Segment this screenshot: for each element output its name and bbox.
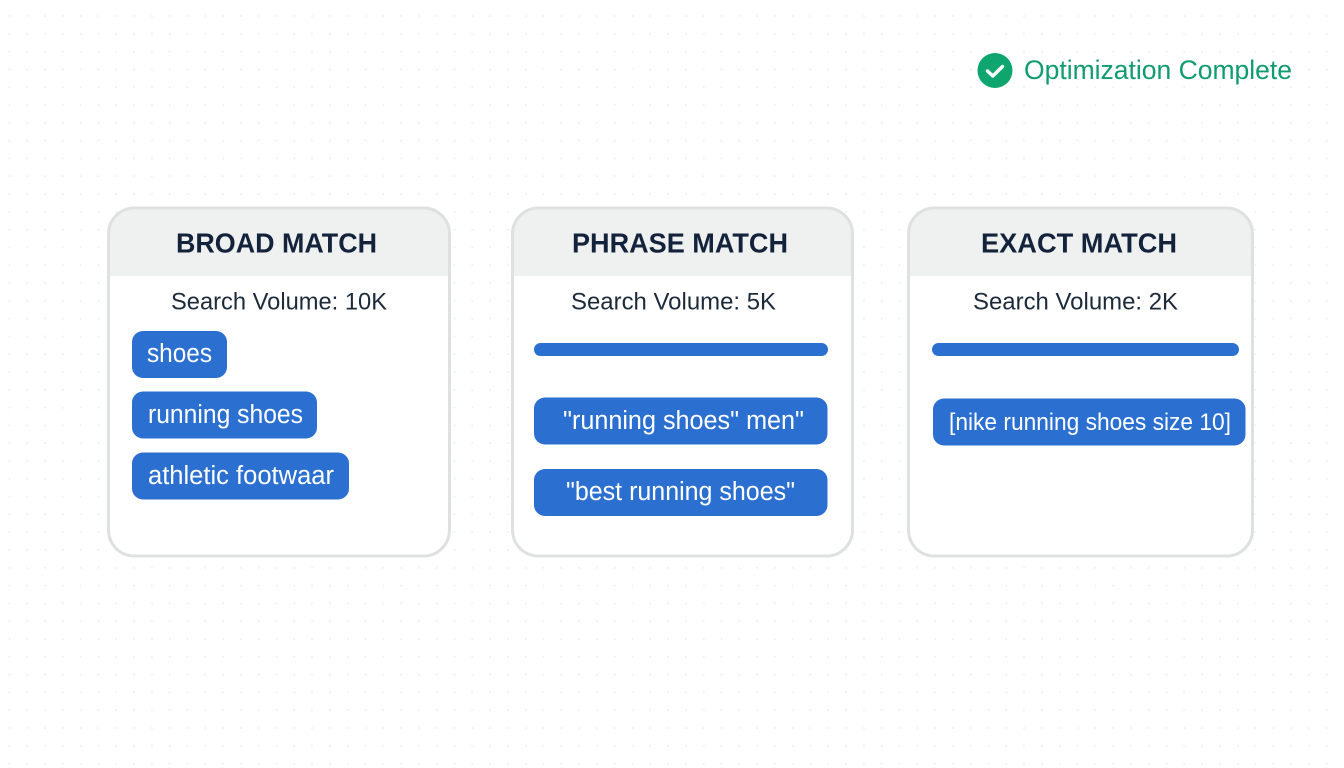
keyword: running shoes: running shoes xyxy=(148,401,303,429)
panel: broad match xyxy=(108,208,450,556)
keyword: nike running shoes size 10: [nike running shoes size 10] xyxy=(949,409,1231,436)
search volume: Search Volume: 5K xyxy=(571,288,777,316)
heading: BROAD MATCH xyxy=(176,228,377,258)
keyword: nike running shoes size 10 xyxy=(933,398,1246,446)
heading: PHRASE MATCH xyxy=(572,228,788,258)
panel: exact match xyxy=(908,208,1252,556)
search volume: Search Volume: 2K xyxy=(973,288,1179,316)
keyword: best running shoes xyxy=(534,469,828,516)
volume bar xyxy=(534,343,828,356)
keyword: shoes: shoes xyxy=(147,340,212,368)
keyword: running shoes men xyxy=(534,398,828,444)
icon: green check circle xyxy=(978,53,1012,88)
panel: phrase match xyxy=(512,208,852,556)
search volume: Search Volume: 10K xyxy=(171,288,388,316)
keyword: running shoes xyxy=(132,392,317,438)
volume bar xyxy=(932,343,1239,356)
header band xyxy=(108,208,450,276)
keyword: shoes xyxy=(132,331,227,378)
keyword: athletic footwaar: athletic footwaar xyxy=(148,462,335,490)
header band xyxy=(512,208,852,276)
keyword: running shoes men: "running shoes" men" xyxy=(563,407,804,435)
keyword: athletic footwaar xyxy=(132,452,349,500)
status badge: optimization complete xyxy=(978,53,1292,88)
keyword: best running shoes: "best running shoes" xyxy=(566,478,795,506)
heading: EXACT MATCH xyxy=(981,228,1177,258)
header band xyxy=(908,208,1252,276)
badge label: Optimization Complete xyxy=(1024,55,1292,85)
